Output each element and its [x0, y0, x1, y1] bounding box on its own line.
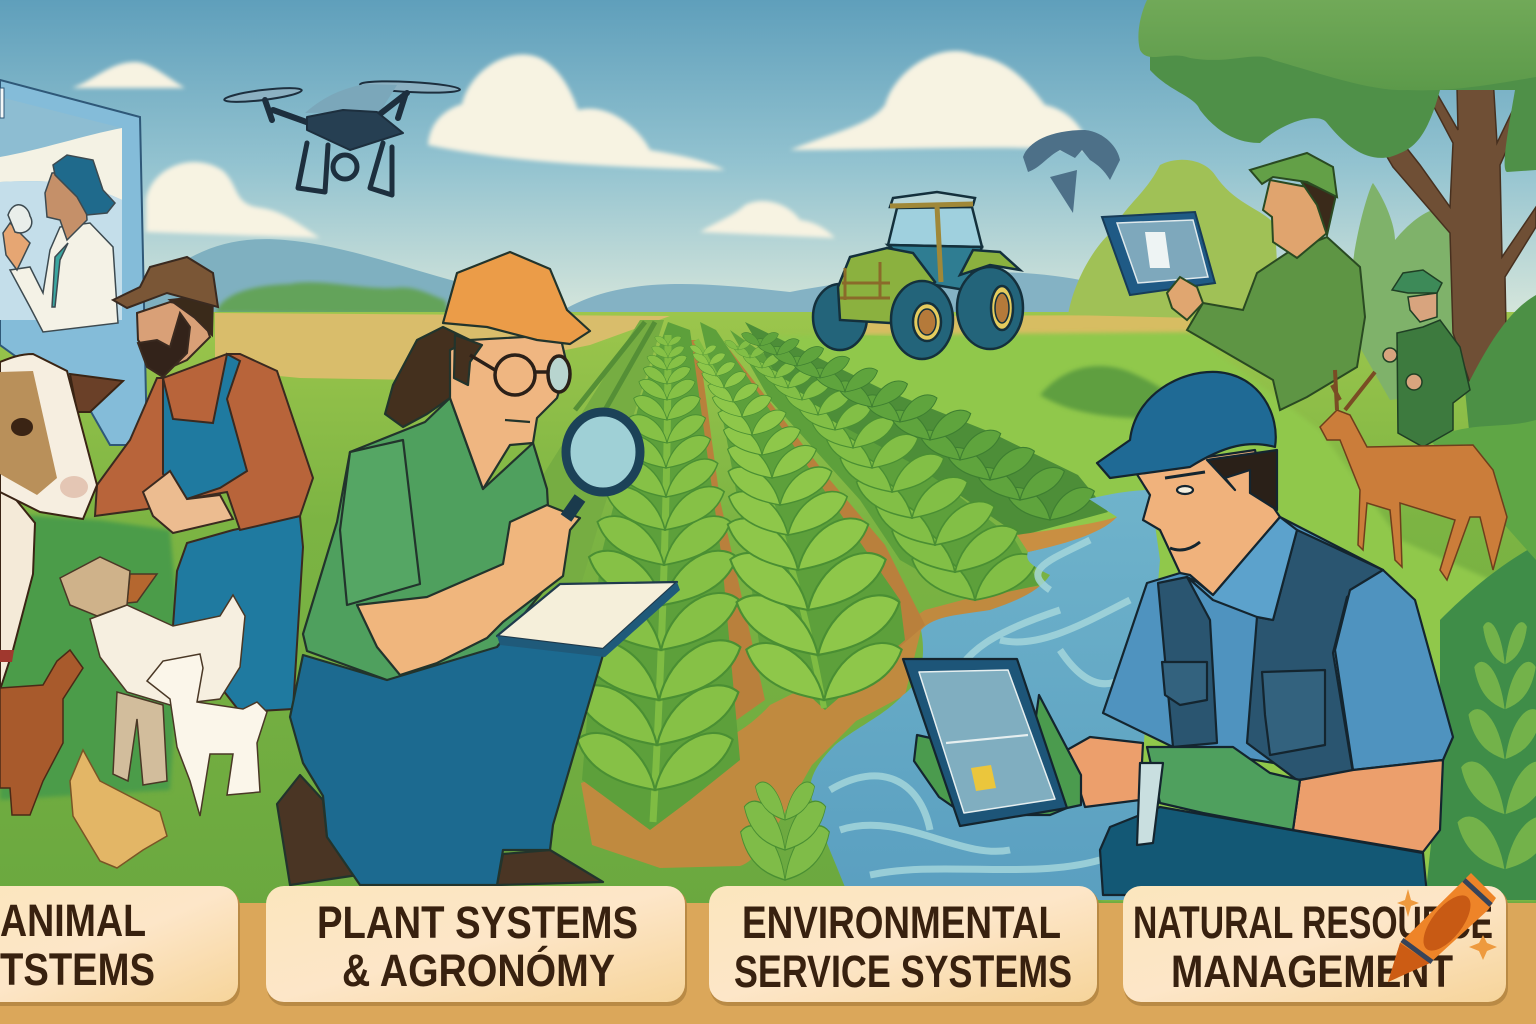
- frame and panel: [0, 80, 147, 445]
- cap: [1097, 372, 1276, 478]
- chick: [70, 750, 167, 868]
- lamb: [147, 654, 267, 816]
- scientist: [3, 155, 118, 332]
- glasses: [470, 355, 570, 395]
- sparkle: [1469, 935, 1497, 960]
- shirt: [303, 398, 552, 680]
- beard: [138, 313, 190, 377]
- long hair: [385, 327, 470, 427]
- label: animal systems: ANIMAL: [0, 895, 146, 946]
- small grass tuft: [741, 782, 829, 880]
- head: [60, 557, 130, 616]
- hair front: [454, 335, 482, 385]
- face: [137, 302, 210, 372]
- waterfall: [1145, 232, 1170, 268]
- clouds: [72, 51, 1090, 238]
- label: natural resource management: MANAGEMENT: [1171, 946, 1453, 997]
- cap: [1250, 153, 1337, 197]
- cab lower: [888, 245, 982, 290]
- eye: [12, 419, 32, 435]
- ear: [70, 374, 123, 412]
- dark grass around animals: [0, 515, 180, 800]
- tan patch: [0, 371, 57, 495]
- cow: [0, 354, 123, 690]
- front wheel: [813, 284, 867, 350]
- plant row 4: [742, 332, 1094, 520]
- magnifier handle: [566, 498, 580, 518]
- label: environmental service systems: SERVICE SYSTEMS: [734, 946, 1072, 997]
- label: animal systems: TSTEMS: [0, 944, 155, 995]
- label: plant systems and agronomy: PLANT SYSTEMS: [317, 897, 638, 948]
- cab glass: [888, 207, 982, 247]
- boot back: [277, 775, 358, 885]
- pockets: [1162, 662, 1325, 755]
- lower canopy: [1150, 30, 1536, 172]
- legs: [298, 143, 392, 195]
- right glove: [1147, 747, 1300, 830]
- brow and mouth: [1165, 472, 1205, 550]
- label: natural resource management: [1123, 886, 1508, 1006]
- icon: crayon watermark: [1388, 873, 1497, 982]
- notebook: [497, 582, 677, 649]
- man with blue cap and tablet: [903, 372, 1453, 895]
- hat: [113, 257, 218, 308]
- muzzle: [60, 476, 88, 498]
- soil furrow 2: [720, 350, 925, 690]
- bushes right: [1068, 160, 1536, 900]
- farmer with brown hat: [95, 257, 313, 712]
- test tube: [1137, 763, 1163, 845]
- notebook cover edge: [497, 582, 680, 657]
- gimbal: [333, 155, 357, 179]
- woman inspecting crops: [277, 252, 680, 885]
- tan footer strip: [0, 903, 1536, 1024]
- neck and face: [450, 335, 567, 489]
- trousers: [173, 516, 303, 712]
- head: [0, 354, 97, 519]
- torso and arm: [1187, 237, 1365, 410]
- ear: [127, 574, 157, 603]
- label: plant systems and agronomy: & AGRONÓMY: [342, 945, 615, 996]
- left glove: [914, 695, 1081, 815]
- tall back trees: [1349, 183, 1470, 400]
- interior: [0, 181, 122, 320]
- forester with tablet: [1102, 153, 1365, 410]
- roof: [890, 192, 975, 207]
- hand: [143, 471, 233, 533]
- face: [1263, 180, 1330, 258]
- legs: [113, 692, 167, 785]
- eye: [1177, 486, 1193, 494]
- collar: [1187, 517, 1297, 620]
- body: [307, 110, 403, 150]
- label: environmental service systems: ENVIRONMENTAL: [742, 897, 1061, 948]
- hair: [1207, 450, 1277, 510]
- tractor: [813, 192, 1023, 359]
- right field hedge: [1040, 366, 1200, 419]
- brown hen: [0, 650, 83, 815]
- vest left: [1158, 577, 1217, 747]
- tablet: [903, 659, 1067, 826]
- left forearm: [1067, 737, 1143, 807]
- vest right: [1247, 530, 1383, 780]
- river: [810, 490, 1160, 900]
- sleeve: [340, 440, 420, 605]
- plant row 2: [690, 340, 902, 708]
- magnifier lens: [566, 412, 640, 492]
- cab posts: [890, 204, 973, 282]
- trousers: [1100, 807, 1427, 895]
- boot front: [497, 850, 603, 885]
- mouth: [505, 420, 530, 422]
- field background: [0, 312, 1536, 912]
- green row bases: [582, 322, 740, 830]
- grille: [840, 262, 890, 300]
- hand: [1167, 277, 1203, 320]
- neck and face: [1133, 450, 1280, 595]
- sparkle: [1397, 889, 1419, 917]
- tablet yellow marker: [971, 765, 996, 791]
- background: sky: [0, 0, 1536, 330]
- arms: [265, 93, 407, 124]
- sign tab: [0, 88, 4, 118]
- dome: [305, 84, 397, 113]
- shirt: [1103, 517, 1383, 775]
- body: [90, 595, 245, 705]
- label: animal systems: [0, 886, 240, 1006]
- distant tree line: [215, 282, 450, 315]
- lab window: [0, 80, 147, 445]
- rear wheel near: [891, 281, 953, 359]
- small ranger: [1383, 270, 1470, 447]
- right arm: [1293, 760, 1443, 852]
- shirt: [95, 354, 313, 530]
- label: environmental service systems: [709, 886, 1099, 1006]
- hair: [170, 295, 213, 335]
- hood: [838, 248, 935, 323]
- label: plant systems and agronomy: [266, 886, 687, 1006]
- upper canopy: [1138, 0, 1536, 90]
- crop rows and soil: [540, 320, 1108, 868]
- neck and body: [0, 480, 35, 690]
- deer: [1320, 370, 1507, 580]
- cap: [443, 252, 590, 344]
- collar: [0, 650, 14, 662]
- soil furrow 1: [672, 340, 765, 760]
- goat: [60, 557, 267, 816]
- tablet: [1102, 212, 1215, 295]
- arm: [357, 505, 580, 675]
- sleeve right: [1335, 570, 1453, 770]
- plant row 3: [725, 340, 1038, 600]
- fender: [960, 250, 1020, 275]
- cloud on glass: [0, 128, 122, 200]
- yellow field band: [215, 313, 670, 380]
- rotors: [224, 85, 302, 105]
- plant row 1: [576, 335, 740, 822]
- distant hills: [145, 239, 1090, 315]
- bright grass right: [760, 332, 1536, 900]
- trousers: [290, 638, 603, 885]
- hair: [1300, 180, 1336, 235]
- soil bed: [581, 585, 1050, 868]
- drone: [224, 79, 460, 195]
- tree: [1138, 0, 1536, 400]
- overall bib: [163, 354, 247, 499]
- rear wheel far: [957, 267, 1023, 349]
- trunk and branches: [1273, 63, 1536, 383]
- window glass: [0, 97, 122, 320]
- icon: flying turbine: [1023, 130, 1120, 213]
- tablet divider: [946, 735, 1028, 743]
- left far rows: [540, 320, 664, 640]
